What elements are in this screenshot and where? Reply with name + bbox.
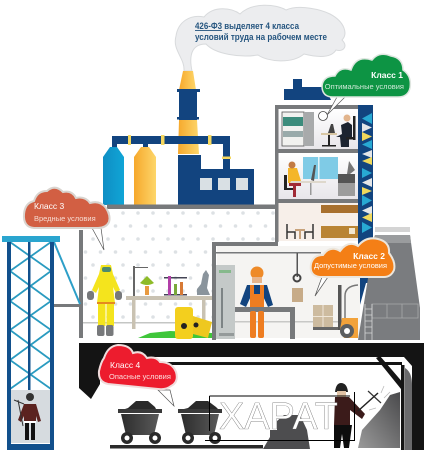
coal rock face bbox=[358, 392, 400, 448]
mine cart 2 bbox=[178, 401, 222, 444]
icon: clock bbox=[318, 112, 328, 120]
tanks bbox=[103, 147, 156, 205]
crane hook and box bbox=[292, 253, 303, 302]
title text: 426-Ф3 выделяет 4 класса bbox=[195, 21, 300, 31]
class 1 heading: Класс 1 bbox=[371, 70, 403, 80]
machine bbox=[216, 265, 235, 339]
class 2 label: Допустимые условия bbox=[314, 261, 387, 270]
coal cart 3 bbox=[263, 415, 310, 449]
miner with pickaxe bbox=[334, 383, 390, 448]
panel: workshop room bbox=[212, 209, 360, 340]
class 2 heading: Класс 2 bbox=[353, 251, 385, 261]
icon: factory worker bbox=[240, 266, 273, 338]
callout: class 2 bbox=[311, 238, 394, 296]
icon: hazmat worker bbox=[87, 265, 122, 336]
callout: class 1 bbox=[322, 54, 410, 115]
callout: class 3 bbox=[24, 188, 110, 250]
pallet of boxes bbox=[313, 305, 340, 330]
callout: class 4 bbox=[99, 345, 177, 406]
mine shaft tower bbox=[2, 236, 80, 450]
class 3 label: Вредные условия bbox=[34, 214, 96, 223]
office 3: dining set and cabinets bbox=[287, 205, 358, 239]
green spill bbox=[138, 331, 212, 338]
watermark: ХАРАТ: ХАРАТ bbox=[219, 396, 338, 438]
class 4 label: Опасные условия bbox=[109, 372, 171, 381]
barrels bbox=[175, 307, 212, 339]
smoke cloud: title bbox=[175, 5, 345, 71]
worktable bbox=[235, 307, 295, 339]
office 2: window, worker, printer bbox=[284, 157, 355, 197]
office 1: shelves and clerk bbox=[282, 112, 356, 147]
forklift bbox=[338, 285, 358, 338]
panel: tower offices bbox=[275, 105, 358, 242]
panel: lab room bbox=[54, 204, 278, 339]
lab table bbox=[126, 296, 213, 329]
factory: chimney and building bbox=[112, 71, 254, 205]
elevator cage bbox=[11, 390, 50, 443]
lab equipment bbox=[133, 266, 210, 296]
class 4 heading: Класс 4 bbox=[110, 360, 140, 370]
lattice column bbox=[358, 105, 373, 312]
class 1 label: Оптимальные условия bbox=[325, 82, 404, 91]
underground mine tunnel bbox=[79, 343, 424, 450]
icon: elevator miner bbox=[14, 393, 41, 440]
silo bbox=[358, 227, 420, 340]
title text line 2: условий труда на рабочем месте bbox=[195, 32, 327, 42]
mine cart 1 bbox=[118, 401, 162, 444]
watermark: ХАРАТ bbox=[205, 392, 354, 440]
class 3 heading: Класс 3 bbox=[34, 201, 64, 211]
roof unit bbox=[284, 79, 331, 100]
